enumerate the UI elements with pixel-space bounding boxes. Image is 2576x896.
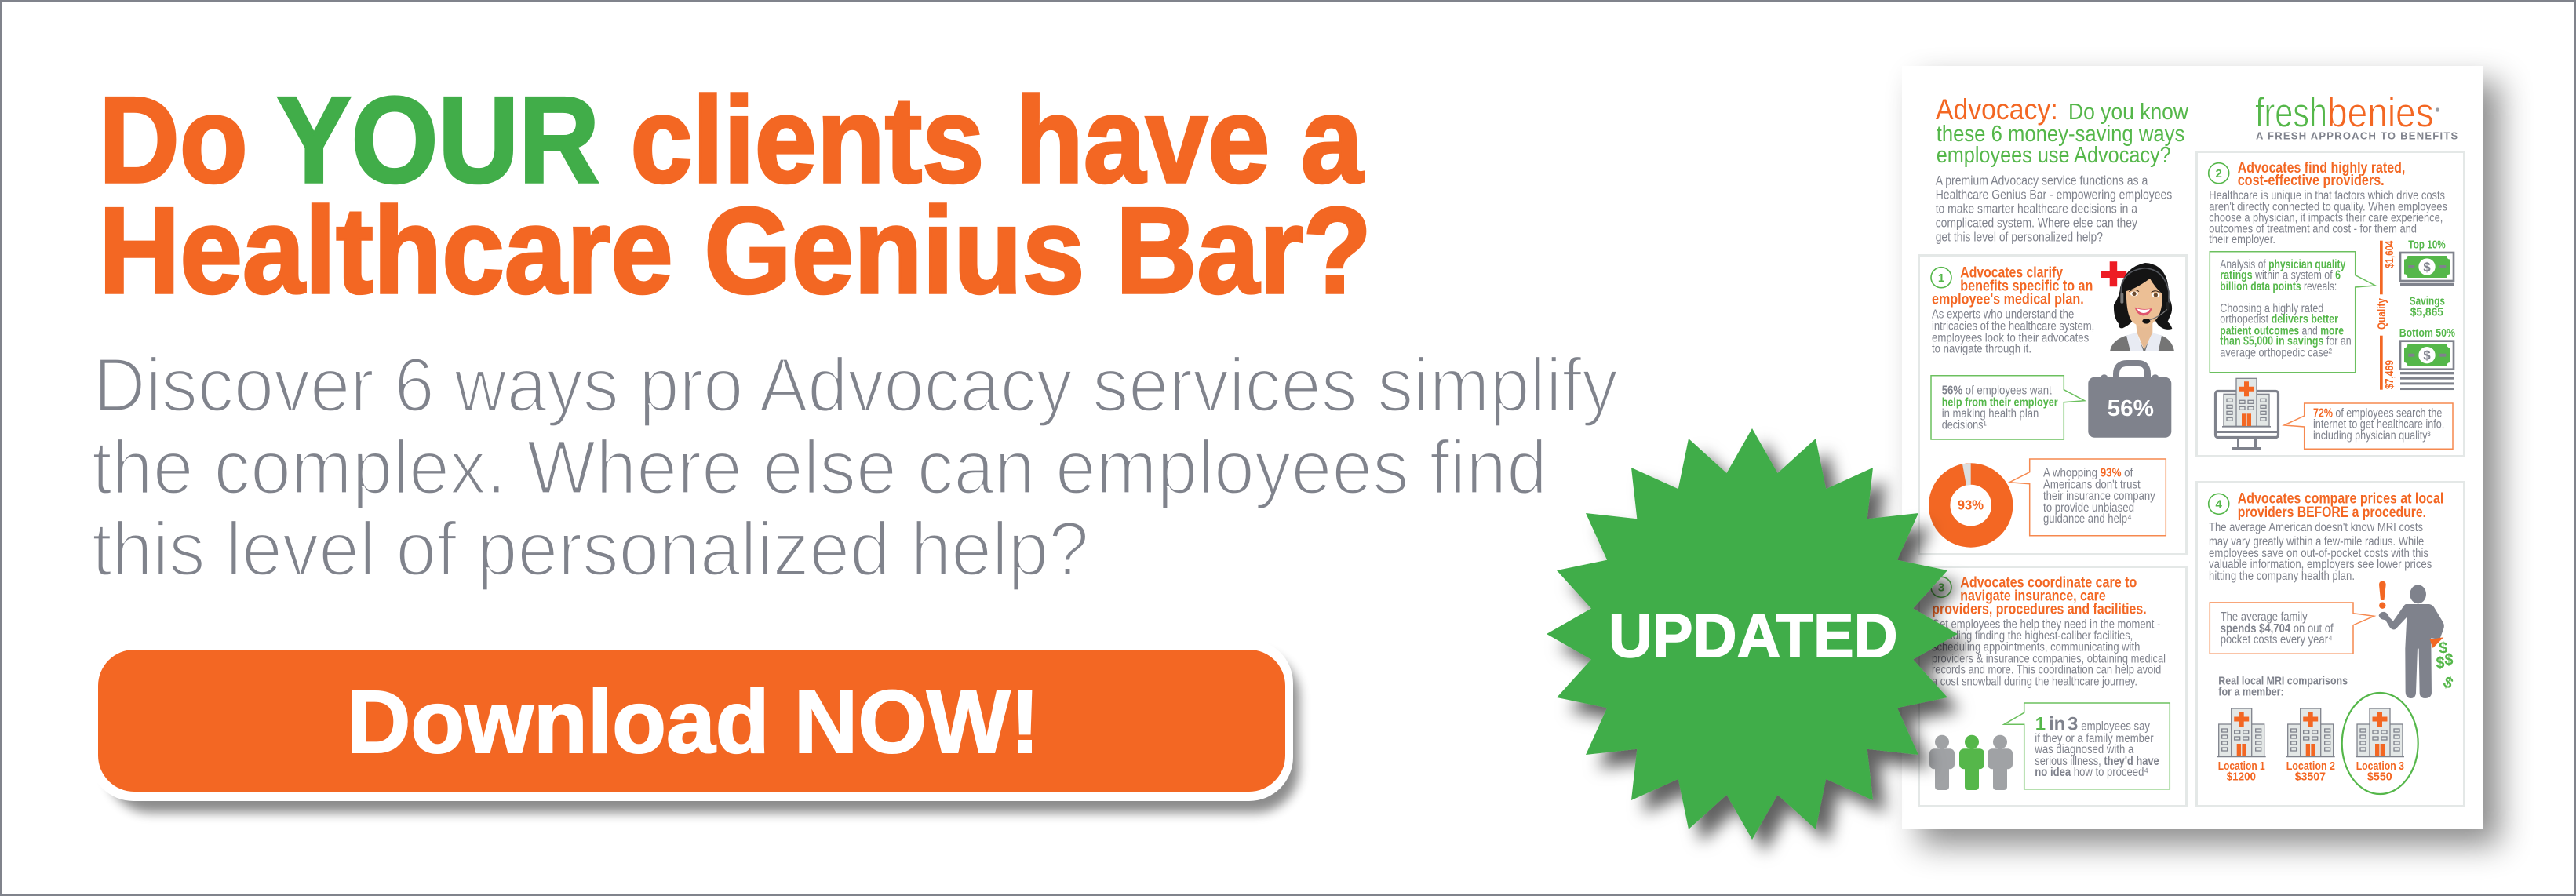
heading 4: providers BEFORE a procedure. [2238,504,2426,521]
heading 3 [1932,574,2147,617]
location 1 hospital: $1200 [2227,770,2256,784]
chart: quality axis [2375,240,2396,390]
callout: family spend: pocket costs every year⁴ [2221,633,2333,647]
number badge 3: 3 [1938,581,1944,595]
text: MRI comparisons [2218,675,2348,699]
chart: quality axis: $1,604 [2383,240,2396,268]
body text 1: As experts who understand the [1932,308,2074,321]
location 1 hospital [2217,708,2266,784]
number badge 2 [2209,163,2229,184]
callout: 56%: 56% of employees want [1942,384,2052,398]
document heading: Do you know [2068,100,2189,125]
body text 3: Get employees the help they need in the moment - [1932,617,2160,631]
heading 1: benefits specific to an [1960,278,2093,295]
icon: person losing money: $ [2444,652,2454,669]
subtitle: Discover 6 ways pro Advocacy services simplify [93,342,1618,428]
heading 1: employee's medical plan. [1932,291,2084,308]
icon: advocate woman with headset [2110,263,2174,351]
heading 4 [2238,490,2443,521]
location 3 hospital, circled: $550 [2367,770,2392,784]
callout: 72% search: 72% of employees search the [2313,407,2442,421]
callout: 93% distrust: their insurance company [2043,490,2155,503]
document heading: employees use Advocacy? [1937,143,2171,168]
panel 1: clarify benefits [1919,256,2186,554]
callout: physician quality: orthopedist delivers better [2220,313,2338,326]
heading 2 [2238,159,2405,189]
intro text [1936,174,2172,245]
callout: 56%: help from their employer [1942,396,2058,410]
starburst badge: updated [1547,428,1958,840]
callout: 72% search: including physician quality³ [2313,429,2431,443]
body text 4: hitting the company health plan. [2209,570,2355,583]
intro text: to make smarter healthcare decisions in a [1936,202,2138,217]
body text 2: outcomes of treatment and cost - for them and [2209,223,2417,236]
body text 1: intricacies of the healthcare system, [1932,319,2094,333]
number badge 4 [2209,494,2229,514]
logo: freshbenies: A FRESH APPROACH TO BENEFITS [2256,129,2458,141]
label: top 10%: Top 10% [2408,239,2446,252]
heading 1: Advocates clarify [1960,264,2063,281]
callout: family spend: The average family [2221,610,2308,624]
callout: physician quality: billion data points reveals: [2220,280,2337,293]
body text 2: Healthcare is unique in that factors which drive costs [2209,189,2445,202]
callout: family spend [2210,603,2374,654]
callout: 1 in 3 [2004,703,2170,789]
label: savings [2410,294,2445,319]
icon: person losing money: $ [2436,655,2445,672]
text: MRI comparisons: for a member: [2218,686,2284,699]
number badge 1: 1 [1938,271,1944,285]
icon: dollar bill top [2400,253,2454,286]
document heading: these 6 money-saving ways [1937,122,2184,147]
location 3 hospital, circled: Location 3 [2356,759,2404,773]
callout: physician quality: than $5,000 in savings for an [2220,335,2352,348]
heading 1 [1932,264,2093,308]
number badge 4: 4 [2216,498,2223,512]
title: Healthcare Genius Bar? [99,183,1372,319]
number badge 3 [1931,577,1951,597]
location 2 hospital: $3507 [2295,770,2326,784]
download button: Download NOW! [347,672,1040,771]
chart: quality axis: Quality [2375,297,2388,330]
icon: dollar bill stack [2400,341,2454,390]
callout: 1 in 3: no idea how to proceed⁴ [2035,766,2148,779]
panel 2: find providers [2197,152,2464,457]
callout: 1 in 3: serious illness, they'd have [2035,755,2159,768]
callout: physician quality: average orthopedic case² [2220,346,2332,359]
callout: 93% distrust [2009,459,2166,536]
icon: three people [1929,735,2013,790]
infographic document [1902,66,2483,829]
callout: 93% distrust: to provide unbiased [2043,501,2134,515]
location 1 hospital: Location 1 [2218,759,2265,773]
download button [89,639,1299,813]
callout: physician quality: ratings within a system of 6 [2220,269,2341,282]
body text 2: their employer. [2209,233,2275,246]
heading 2: cost-effective providers. [2238,172,2385,189]
heading 3: Advocates coordinate care to [1960,574,2137,591]
body text 3: a cost snowball during the healthcare journey. [1932,675,2137,688]
body text 2: aren't directly connected to quality. When employees [2209,201,2447,214]
callout: family spend: spends $4,704 on out of [2221,622,2334,636]
callout: 1 in 3: was diagnosed with a [2034,743,2134,756]
body text 2 [2209,189,2447,246]
callout: 93% distrust: guidance and help⁴ [2043,512,2132,526]
heading 3: providers, procedures and facilities. [1932,600,2147,617]
callout: physician quality: Choosing a highly rated [2220,302,2323,315]
body text 4: may vary greatly within a few-mile radius. While [2209,535,2424,548]
icon: exclamation mark [2379,581,2386,609]
callout: 1 in 3: 1 [2035,714,2046,735]
body text 2: choose a physician, it impacts their care experience, [2209,211,2443,224]
icon: person losing money: $ [2439,640,2447,657]
panel 3: coordinate care [1919,566,2186,807]
body text 3: providers & insurance companies, obtaining medical [1932,652,2166,665]
callout: 72% search [2284,403,2453,449]
intro text: complicated system. Where else can they [1936,217,2138,231]
body text 1: to navigate through it. [1932,342,2031,355]
callout: 1 in 3: in [2049,714,2065,735]
body text 4: The average American doesn't know MRI costs [2209,521,2423,534]
body text 4: employees save on out-of-pocket costs with this [2209,547,2428,560]
document heading: Advocacy: [1936,93,2058,126]
label: savings: $5,865 [2410,306,2443,319]
subtitle: this level of personalized help? [92,506,1089,592]
label: bottom 50%: Bottom 50% [2399,326,2455,340]
intro text: Healthcare Genius Bar - empowering employees [1936,188,2172,202]
heading 2: Advocates find highly rated, [2238,159,2405,177]
icon: computer monitor with hospital [2216,378,2279,450]
title: Do YOUR clients have a [99,72,1364,209]
icon: red cross [2101,261,2126,286]
callout: 93% distrust: Americans don't trust [2043,479,2141,492]
chart: quality axis: $7,469 [2383,360,2396,389]
body text 1: employees look to their advocates [1932,331,2090,344]
panel 4: compare prices [2197,482,2464,807]
icon: briefcase 56%: 56% [2108,396,2154,421]
callout: 56%: in making health plan [1942,407,2039,421]
body text 3: including finding the highest-caliber facilities, [1932,629,2133,643]
number badge 2: 2 [2216,167,2222,180]
body text 3 [1932,617,2166,688]
body text 1 [1932,308,2094,355]
number badge 1 [1931,268,1951,288]
location 2 hospital [2286,708,2335,784]
logo: freshbenies [2255,90,2458,141]
donut chart: 93%: 93% [1958,497,1984,513]
body text 3: records and more. This coordination can help avoid [1932,663,2161,676]
icon: person losing money [2379,585,2456,698]
subtitle: the complex. Where else can employees find [92,424,1547,510]
title [99,72,1372,319]
subtitle [92,342,1618,592]
location 3 hospital, circled [2342,693,2418,794]
icon: briefcase 56% [2088,363,2171,438]
body text 4: valuable information, employers see lower prices [2209,558,2432,571]
label: savings: Savings [2410,294,2445,308]
text: MRI comparisons: Real local MRI comparisons [2218,675,2348,688]
logo: freshbenies: fresh [2255,90,2327,137]
body text 3: scheduling appointments, communicating with [1932,640,2140,654]
location 2 hospital: Location 2 [2286,759,2335,773]
callout: physician quality: patient outcomes and more [2220,324,2344,337]
document heading [1936,93,2189,168]
callout: 56% [1931,376,2085,439]
heading 3: navigate insurance, care [1960,587,2106,604]
heading 4: Advocates compare prices at local [2238,490,2443,508]
callout: 72% search: internet to get healthcare info, [2313,417,2444,431]
icon: dollar bill stack: $ [2423,348,2431,363]
callout: 93% distrust: A whopping 93% of [2043,467,2133,480]
callout: 1 in 3: if they or a family member [2035,732,2154,745]
starburst badge: updated: UPDATED [1609,601,1898,670]
callout: 1 in 3: 3 [2068,714,2078,735]
callout: physician quality [2210,252,2375,373]
logo: freshbenies: benies [2327,90,2434,137]
icon: dollar bill top: $ [2423,260,2431,275]
callout: physician quality: Analysis of physician quality [2220,258,2346,271]
intro text: A premium Advocacy service functions as a [1936,174,2148,188]
intro text: get this level of personalized help? [1936,231,2103,245]
icon: person losing money: $ [2440,673,2456,693]
callout: 1 in 3: employees say [2081,720,2150,734]
body text 4 [2209,521,2432,583]
callout: 56%: decisions¹ [1942,419,1987,432]
donut chart: 93% [1940,463,2002,537]
